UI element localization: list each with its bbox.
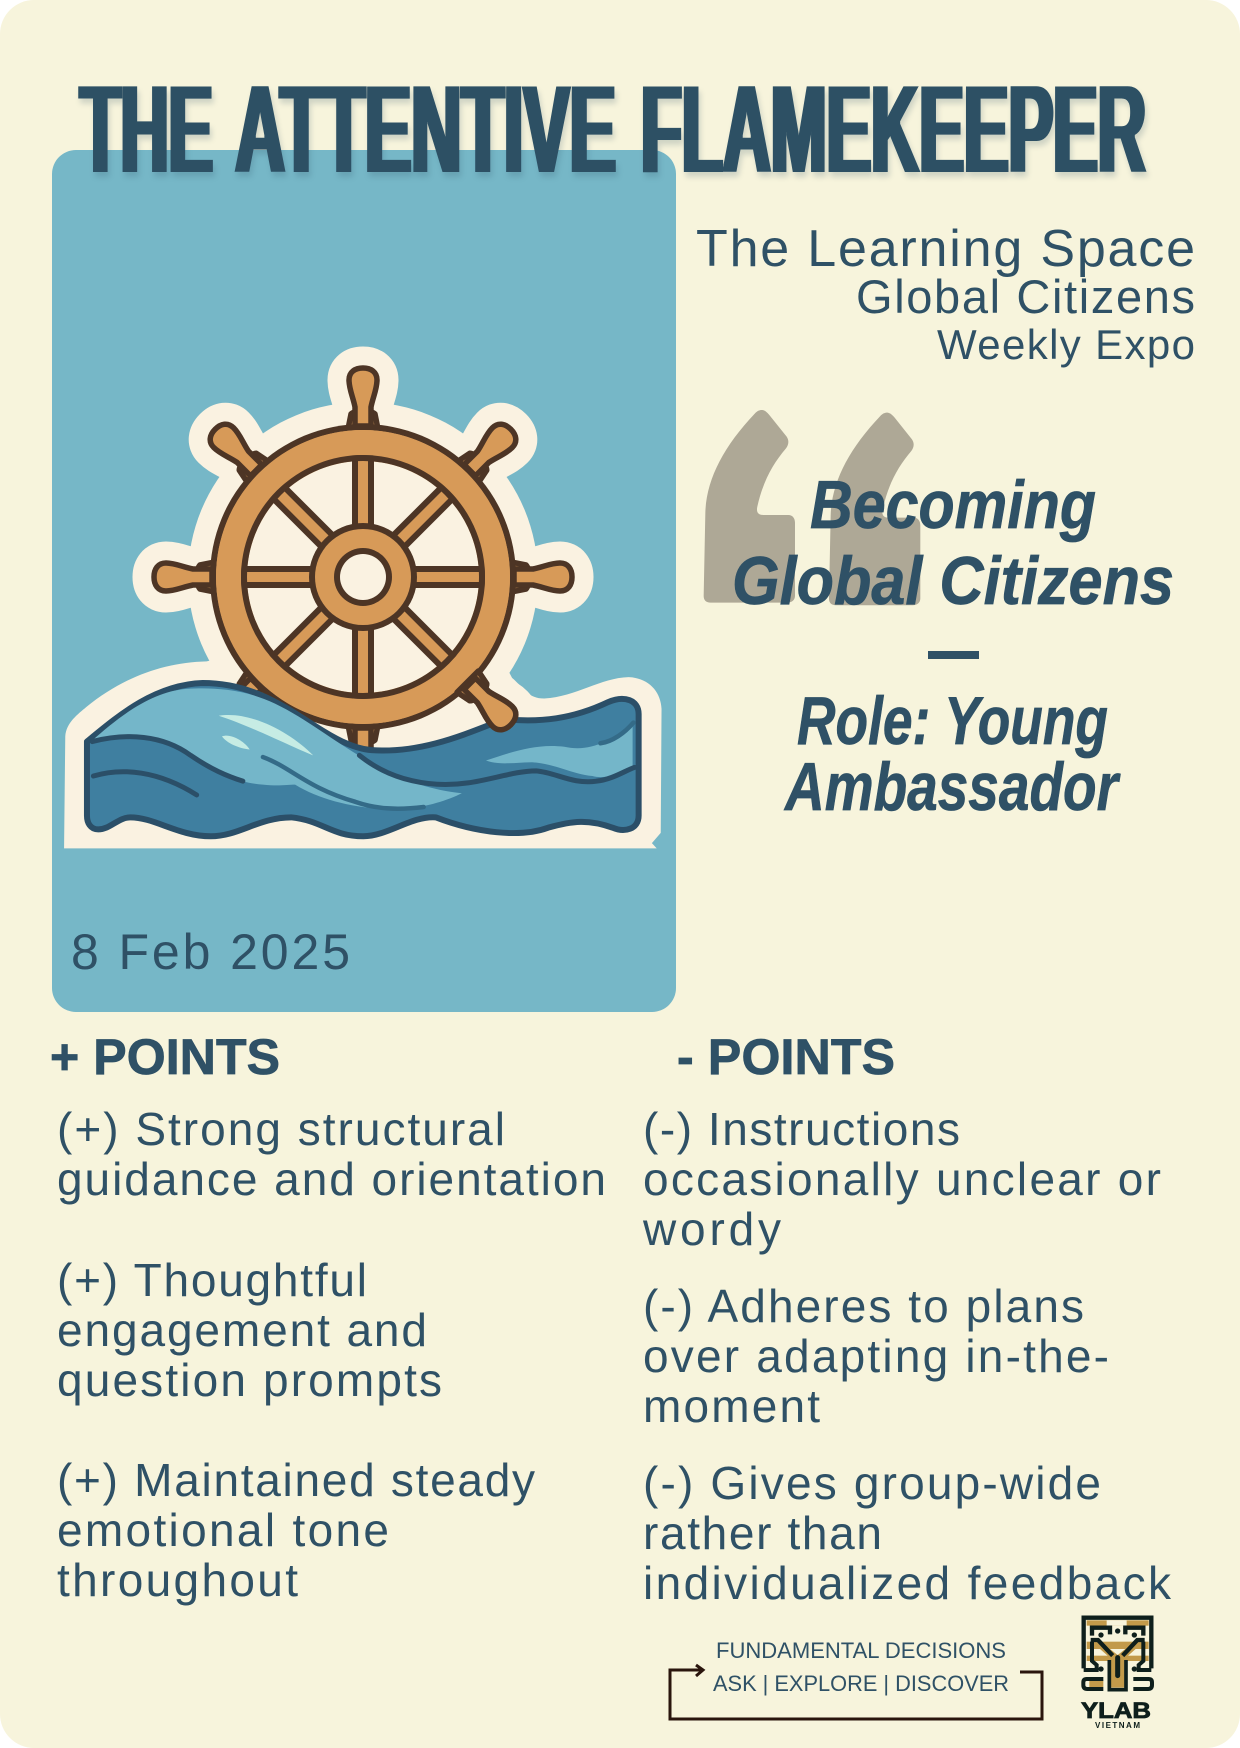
footer tagline [713, 1638, 1009, 1696]
heading: + points: + POINTS [50, 1029, 280, 1085]
point 1: (+) Strong structural [57, 1103, 505, 1155]
waves [87, 683, 639, 836]
title [80, 58, 1146, 200]
panel: plus points [50, 1029, 606, 1606]
icon: quotation marks [704, 410, 920, 605]
point 1 [57, 1103, 606, 1205]
point 2: moment [643, 1380, 820, 1432]
point 3: rather than [643, 1507, 882, 1559]
logo: YLAB Vietnam: YLAB [1081, 1698, 1151, 1723]
point 2: over adapting in-the- [643, 1330, 1109, 1382]
point 2 [57, 1254, 442, 1406]
point 1: wordy [642, 1203, 781, 1255]
date: 8 Feb 2025 [71, 924, 350, 980]
wheel handle over wave [457, 671, 521, 735]
point 1: occasionally unclear or [643, 1153, 1161, 1205]
ship wheel [154, 368, 572, 786]
title: ATTENTIVE [235, 58, 616, 200]
footer tagline: ASK | EXPLORE | DISCOVER [713, 1671, 1009, 1696]
point 1 [642, 1103, 1161, 1255]
point 3 [643, 1457, 1172, 1609]
panel: illustration card [52, 150, 676, 1012]
logo: YLAB Vietnam: VIETNAM [1095, 1721, 1140, 1730]
subtitle block: Weekly Expo [937, 321, 1195, 368]
illustration: ship wheel on waves [64, 368, 662, 848]
quote text: Ambassador [783, 749, 1121, 825]
heading: - points: - POINTS [677, 1029, 895, 1085]
sticker outline [64, 368, 662, 848]
point 2 [643, 1280, 1109, 1432]
point 3: (-) Gives group-wide [643, 1457, 1101, 1509]
arrow: loop [670, 1665, 1042, 1719]
point 3: emotional tone [57, 1504, 389, 1556]
quote text: Becoming [810, 467, 1096, 543]
logo mark [1083, 1618, 1152, 1690]
quote text [732, 467, 1174, 825]
subtitle block [696, 220, 1195, 368]
point 2: (-) Adheres to plans [643, 1280, 1084, 1332]
subtitle block: The Learning Space [696, 220, 1195, 278]
point 3 [57, 1454, 535, 1606]
point 3: (+) Maintained steady [57, 1454, 535, 1506]
subtitle block: Global Citizens [856, 270, 1195, 323]
quote text: Global Citizens [732, 543, 1174, 619]
point 2: engagement and [57, 1304, 427, 1356]
point 3: individualized feedback [643, 1557, 1172, 1609]
point 1: guidance and orientation [57, 1153, 606, 1205]
title: THE [80, 58, 213, 200]
point 2: (+) Thoughtful [57, 1254, 367, 1306]
footer tagline: FUNDAMENTAL DECISIONS [716, 1638, 1006, 1663]
logo: YLAB Vietnam [1081, 1618, 1152, 1730]
point 1: (-) Instructions [643, 1103, 960, 1155]
panel: minus points [642, 1029, 1172, 1609]
point 3: throughout [57, 1554, 298, 1606]
point 2: question prompts [57, 1354, 442, 1406]
quote text: Role: Young [797, 683, 1108, 759]
